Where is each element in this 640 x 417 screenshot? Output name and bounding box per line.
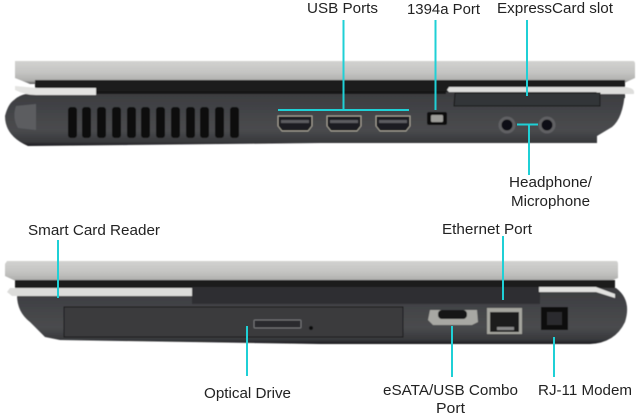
air vents bbox=[68, 107, 239, 138]
left silver trim bbox=[7, 288, 192, 296]
label: Smart Card Reader: Smart Card Reader bbox=[28, 222, 160, 239]
1394a port bbox=[427, 112, 447, 125]
callout line: ExpressCard slot bbox=[526, 20, 528, 96]
ExpressCard silver trim bbox=[447, 87, 634, 94]
label: Headphone/Microphone: Headphone/ bbox=[509, 174, 593, 191]
callout line: 1394a Port bbox=[434, 20, 436, 110]
lid bbox=[15, 61, 635, 84]
right silver trim bbox=[539, 287, 615, 298]
label: eSATA/USB Combo Port bbox=[383, 382, 518, 417]
hinge gap bbox=[35, 80, 625, 98]
laptop: right side view bbox=[5, 261, 627, 344]
label: USB Ports: USB Ports bbox=[307, 0, 378, 17]
eSATA USB combo port bbox=[428, 310, 478, 325]
USB ports bbox=[278, 116, 410, 131]
laptop: left side view bbox=[5, 61, 635, 146]
callout line: RJ-11 Modem bbox=[553, 337, 555, 377]
callout line: Ethernet Port bbox=[502, 236, 504, 300]
label: eSATA/USB Combo Port: Port bbox=[436, 400, 466, 417]
chassis top band bbox=[96, 91, 446, 94]
label: Headphone/Microphone bbox=[509, 174, 593, 210]
audio jacks bbox=[500, 118, 554, 132]
chassis bbox=[5, 92, 625, 146]
callout lines: USB Ports bbox=[278, 20, 409, 110]
label: RJ-11 Modem: RJ-11 Modem bbox=[538, 382, 632, 399]
callout line: Smart Card Reader bbox=[57, 240, 59, 298]
RJ-11 port bbox=[541, 307, 568, 330]
label: ExpressCard slot: ExpressCard slot bbox=[497, 0, 614, 17]
callout line: Optical Drive bbox=[246, 326, 248, 376]
callout line: eSATA/USB Combo Port bbox=[451, 326, 453, 377]
label: 1394a Port: 1394a Port bbox=[407, 1, 481, 18]
left silver trim bbox=[15, 86, 96, 95]
ExpressCard slot bbox=[454, 93, 600, 106]
Ethernet port bbox=[487, 308, 522, 334]
hinge gap bbox=[15, 280, 615, 292]
optical drive eject button bbox=[254, 320, 301, 328]
chassis bbox=[16, 288, 627, 344]
dark hinge wedge bbox=[192, 287, 540, 304]
label: Optical Drive: Optical Drive bbox=[204, 385, 291, 402]
chassis left highlight bbox=[14, 104, 36, 130]
label: Headphone/Microphone: Microphone bbox=[511, 193, 590, 210]
optical drive bay bbox=[64, 307, 403, 337]
label: eSATA/USB Combo Port: eSATA/USB Combo bbox=[383, 382, 518, 399]
callout lines: Headphone/Microphone bbox=[517, 124, 538, 175]
optical drive indicator bbox=[309, 326, 313, 330]
lid bbox=[5, 261, 618, 283]
label: Ethernet Port: Ethernet Port bbox=[442, 221, 533, 238]
